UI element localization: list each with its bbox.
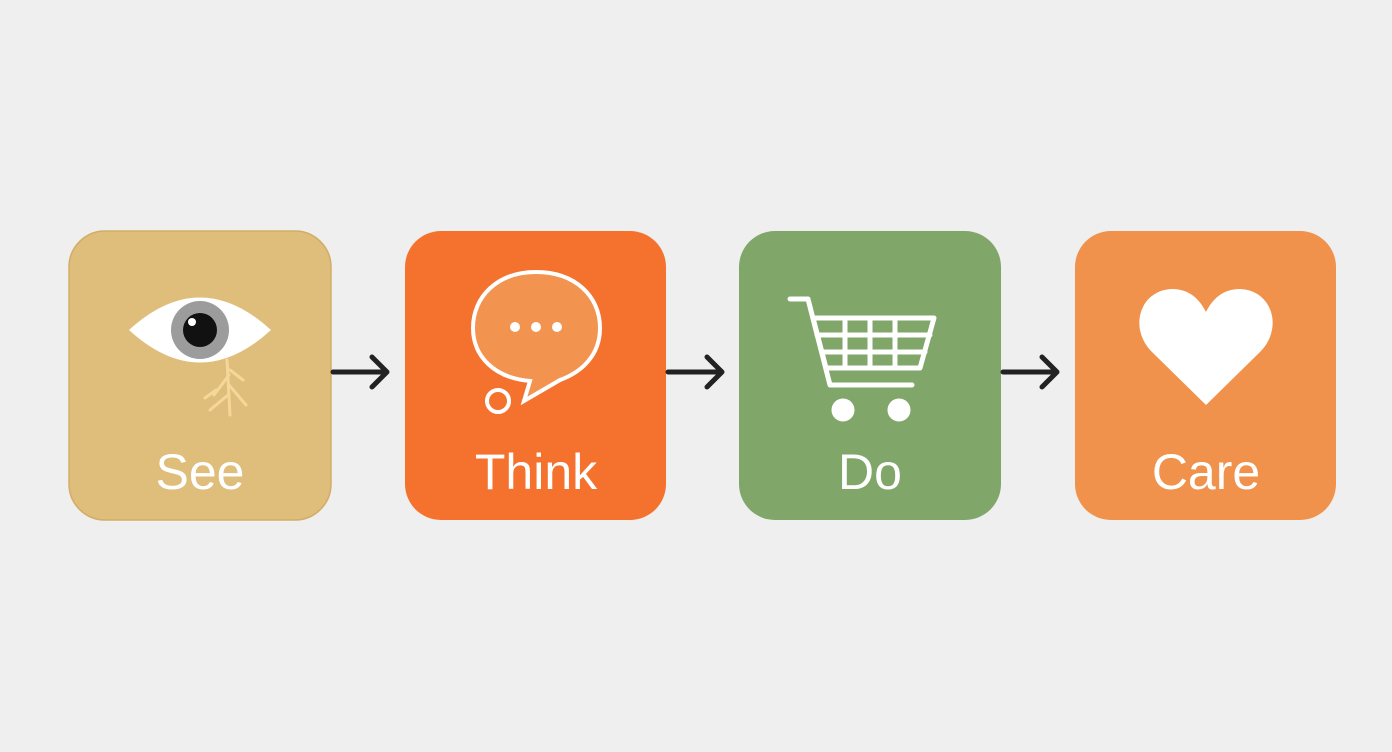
panel: think (405, 231, 666, 520)
arrow 2 (668, 357, 722, 387)
arrow 1 (333, 357, 387, 387)
arrow 3 (1003, 357, 1057, 387)
panel: care (1075, 231, 1336, 520)
label: See: See (156, 444, 244, 500)
icon: heart (1139, 289, 1273, 405)
label: Do: Do (838, 444, 902, 500)
panel: see (69, 231, 331, 520)
panel: do (739, 231, 1001, 520)
icon: cart (790, 299, 934, 419)
icon: thought bubble (473, 272, 600, 412)
label: Care: Care (1152, 444, 1260, 500)
label: Think: Think (475, 444, 598, 500)
icon: eye (129, 298, 271, 415)
